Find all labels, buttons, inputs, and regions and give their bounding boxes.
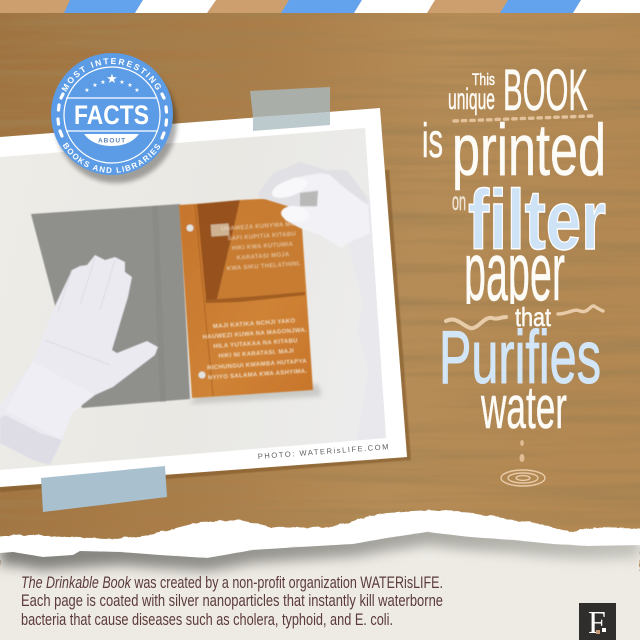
airmail stripes — [0, 0, 640, 13]
body text: bacteria that cause diseases such as cholera, typhoid, and E. coli. — [21, 610, 393, 629]
left glove — [0, 255, 158, 465]
book page text: KWA SIKU THELATHINI. — [227, 261, 301, 272]
book pages — [179, 197, 313, 398]
book page text: KARATASI MOJA — [237, 252, 290, 262]
badge side dashes — [58, 94, 166, 138]
dotted divider — [454, 116, 592, 121]
badge stars: ★ — [127, 82, 133, 89]
book page text: SAFI KUPITIA KITABU — [227, 231, 296, 242]
badge stars: ★ — [92, 82, 98, 89]
bottom paper panel — [0, 532, 640, 640]
book page text: HIKI NI KARATASI. MAJI — [218, 348, 294, 360]
badge stars: ★ — [134, 87, 140, 94]
headline: unique — [448, 83, 495, 116]
book page text — [202, 221, 310, 382]
book page text: HAUWEZI KUWA NA MAGONJWA. — [202, 328, 307, 341]
torn white paper edge — [0, 510, 640, 640]
book page text: HIKI KWA KUTUMIA — [232, 242, 294, 252]
tape: bottom — [41, 466, 167, 512]
logo — [579, 603, 616, 640]
headline: This — [472, 70, 495, 89]
logo: F — [588, 604, 606, 640]
badge stars: ★ — [106, 71, 118, 86]
book page text: MAJI KATIKA NCHJI YAKO — [213, 318, 296, 330]
badge stars — [84, 71, 140, 94]
headline: water — [480, 374, 567, 441]
body text — [21, 573, 443, 629]
badge about — [84, 134, 139, 146]
book cover — [31, 204, 322, 408]
badge heading: FACTS — [74, 100, 149, 130]
photo: book and gloved hands — [0, 128, 386, 470]
badge stars: ★ — [119, 79, 125, 86]
photo: white frame — [0, 108, 407, 487]
photo frame shadow — [0, 170, 411, 492]
headline — [422, 58, 606, 441]
headline: is — [422, 115, 443, 168]
right glove — [259, 163, 370, 248]
book page text: RICHUNGUI KWAMBA HUTAPYA — [207, 359, 307, 372]
badge shadow — [55, 61, 177, 183]
book page text: HILA YUTAKAA NA KITABU — [213, 338, 298, 350]
badge: most interesting facts — [51, 53, 173, 175]
photo credit: PHOTO: WATERisLIFE.COM — [257, 442, 389, 461]
badge stars: ★ — [84, 87, 90, 94]
squiggle: right — [558, 306, 603, 314]
squiggle: left — [446, 317, 506, 328]
badge stars: ★ — [100, 79, 106, 86]
book page text: UNAWEZA KUNYWA MAJI — [221, 221, 301, 233]
badge: most interesting facts: ABOUT — [98, 138, 126, 144]
icon: water drops and ripple — [501, 440, 545, 486]
badge bottom text: BOOKS AND LIBRARIES — [62, 142, 160, 173]
headline: on — [452, 188, 466, 216]
headline: that — [515, 302, 552, 332]
body text: The Drinkable Book was created by a non-profit organization WATERisLIFE. — [21, 573, 443, 592]
badge top text: MOST INTERESTING — [62, 58, 161, 92]
tape: top — [250, 87, 330, 131]
book page text: NYIYO SALAMA KWA ASHYIMA. — [208, 369, 308, 382]
body text: Each page is coated with silver nanoparticles that instantly kill waterborne — [21, 591, 443, 610]
